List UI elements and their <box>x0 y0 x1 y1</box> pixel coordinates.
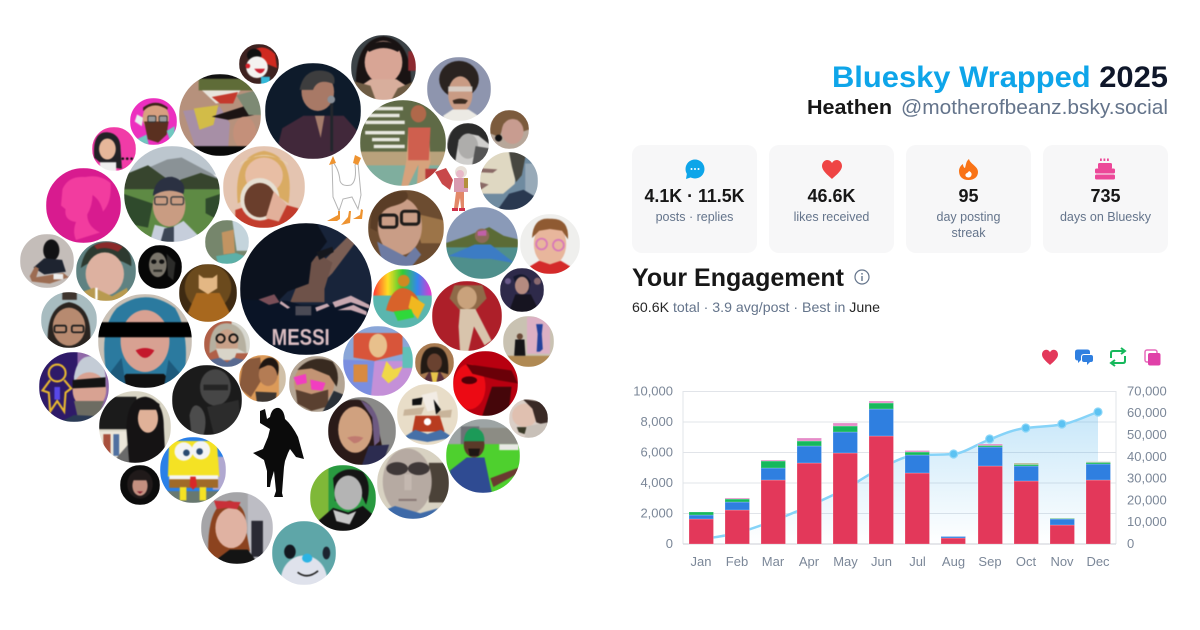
avatar: man swimming in lake <box>446 207 518 279</box>
cumulative line <box>701 412 1098 540</box>
stat value: 4.1K · 11.5K <box>644 186 744 206</box>
left axis labels: 10,000 <box>633 384 673 398</box>
avatar: rainbow cartoon turtle <box>373 269 432 328</box>
avatar: woman in leopard top <box>351 35 416 100</box>
left axis labels: 2,000 <box>640 506 673 520</box>
card: posts and replies <box>632 145 757 253</box>
avatar: man with glasses and cat on head <box>41 292 97 348</box>
icon: chat bubble <box>686 160 704 179</box>
month labels: Dec <box>1086 554 1110 569</box>
right axis labels: 30,000 <box>1127 470 1167 486</box>
avatar: red blurred face <box>453 351 518 416</box>
avatar: redhead with sunglasses on head <box>201 492 273 564</box>
avatar: man in mountain meadow <box>124 146 220 242</box>
avatar: colorful street art collage <box>343 326 413 396</box>
right axis labels: 50,000 <box>1127 427 1167 442</box>
avatar: brown skinned cartoon <box>415 343 454 382</box>
stat label: days on Bluesky <box>1060 210 1152 224</box>
month labels: Oct <box>1016 554 1036 569</box>
avatar: woman in knit hood <box>328 397 396 465</box>
bar: Jun <box>869 401 894 544</box>
month labels: Apr <box>799 554 820 569</box>
avatar: woman in Messi jersey <box>240 223 372 355</box>
stat label: day posting <box>937 210 1001 224</box>
illustration: black superhero silhouette <box>253 408 304 497</box>
avatar: ghoul portrait <box>138 245 182 289</box>
month labels: May <box>833 554 858 569</box>
avatar: teal teddy bear <box>272 521 336 585</box>
bar: Jan <box>689 512 714 544</box>
avatar: singer with microphone <box>265 63 361 159</box>
stat label: posts · replies <box>656 210 733 224</box>
avatar: woman with glasses and scarf <box>368 190 444 266</box>
left axis labels: 4,000 <box>640 475 673 490</box>
card: days on Bluesky <box>1043 145 1168 253</box>
avatar: small dog on red rug <box>432 281 502 351</box>
avatar: blonde woman with mug <box>223 146 305 228</box>
avatar: dark scream mask photo <box>172 365 242 435</box>
avatar: older man in glasses <box>204 321 250 367</box>
cumulative area <box>701 412 1098 544</box>
avatar: Underdog cartoon <box>397 384 458 445</box>
bar: Nov <box>1050 518 1074 544</box>
avatar: blue haired woman with censor bar <box>98 294 192 388</box>
right axis labels: 0 <box>1127 536 1134 551</box>
chart grid <box>683 391 1116 544</box>
avatar: cartoon woman on pink <box>92 127 136 171</box>
avatar: woman in beanie <box>76 241 136 301</box>
avatar: man with red collar <box>520 214 580 274</box>
month labels: Nov <box>1050 554 1074 569</box>
right axis labels: 70,000 <box>1127 384 1167 398</box>
left axis labels: 0 <box>666 536 673 551</box>
avatar: dark haired girl <box>120 465 160 505</box>
avatar: man at green river <box>446 419 520 493</box>
month labels: Sep <box>978 554 1002 569</box>
bar: Sep <box>978 444 1002 544</box>
avatar: woman lying sideways <box>509 399 548 438</box>
avatar: cat in renaissance costume <box>179 264 237 322</box>
handle: @motherofbeanz.bsky.social <box>901 97 1168 119</box>
avatar: woman in Messi jersey: MESSI <box>272 324 330 350</box>
legend: replies bubbles <box>1075 350 1093 365</box>
avatar: person in balaclava <box>20 234 74 288</box>
avatar: green portrait illustration <box>310 465 376 531</box>
month labels <box>691 554 1110 569</box>
stat label: likes received <box>794 210 869 224</box>
avatar: cat in tree <box>205 220 249 264</box>
illustration: goose line art <box>327 155 363 225</box>
bar: May <box>833 423 858 544</box>
icon: heart <box>822 160 842 179</box>
avatar: dark bar scene <box>500 268 544 312</box>
legend: likes heart <box>1042 350 1058 365</box>
bar: Aug <box>941 536 966 544</box>
bar: Oct <box>1014 463 1038 544</box>
legend: reposts arrows <box>1111 348 1125 366</box>
avatar: vintage pinup poster <box>360 100 446 186</box>
left axis labels: 8,000 <box>640 414 673 429</box>
avatar: black and white portrait <box>447 123 489 165</box>
stat value: 46.6K <box>808 186 856 206</box>
cumulative points <box>914 408 1102 459</box>
name: Heathen <box>807 97 892 119</box>
legend icons <box>1042 348 1160 366</box>
avatar: man with dark eye makeup <box>377 447 449 519</box>
avatar: curly haired woman <box>490 110 529 149</box>
right axis labels: 40,000 <box>1127 449 1167 464</box>
right axis labels: 10,000 <box>1127 514 1167 529</box>
stat value: 735 <box>1090 186 1121 206</box>
stacked bars <box>689 401 1110 544</box>
stat label second line: streak <box>951 226 986 240</box>
legend: quotes squares <box>1145 350 1160 366</box>
left axis labels <box>633 384 673 551</box>
avatar: pink Barbie silhouette <box>46 168 121 243</box>
month labels: Aug <box>942 554 965 569</box>
bar: Feb <box>725 498 750 544</box>
left axis labels: 6,000 <box>640 444 673 460</box>
bar: Apr <box>797 438 822 544</box>
icon: info <box>855 270 869 284</box>
avatar: cartoon Wakko <box>239 44 279 84</box>
avatar: museum visitor <box>503 316 554 367</box>
right axis labels <box>1127 384 1167 551</box>
icon: flame <box>959 159 978 180</box>
month labels: Jul <box>909 554 926 569</box>
avatar: afro and glasses portrait <box>427 57 491 121</box>
bar: Mar <box>761 460 786 544</box>
month labels: Mar <box>762 554 785 569</box>
title: Bluesky Wrapped 2025 <box>832 61 1168 94</box>
avatar: blue-gray side face <box>480 152 538 210</box>
combo chart: monthly engagement <box>633 384 1167 569</box>
month labels: Feb <box>726 554 748 569</box>
panel: avatar bubble cluster <box>20 35 580 585</box>
avatar: crochet woman <box>179 74 261 156</box>
right axis labels: 20,000 <box>1127 492 1167 508</box>
stat value: 95 <box>958 186 979 206</box>
avatar: woman with long black hair <box>99 391 171 463</box>
icon: birthday cake <box>1095 158 1115 180</box>
bar: Dec <box>1086 462 1110 544</box>
avatar: man in pink sunglasses <box>289 356 345 412</box>
avatar: SpongeBob cartoon <box>160 437 226 503</box>
heading: Your Engagement: Your Engagement <box>632 264 845 292</box>
right axis labels: 60,000 <box>1127 405 1167 420</box>
month labels: Jan <box>691 554 711 569</box>
illustration: pixel squirrel girl <box>435 166 468 211</box>
bar: Jul <box>905 450 930 544</box>
avatar: neon gingerbread and bearded man <box>39 352 109 422</box>
month labels: Jun <box>871 554 892 569</box>
card: streak <box>906 145 1031 253</box>
avatar: woman with tattoo <box>239 355 286 402</box>
engagement summary: 60.6K total · 3.9 avg/post · Best in June <box>632 299 880 315</box>
card: likes <box>769 145 894 253</box>
avatar: bearded cartoon with glasses <box>130 98 177 145</box>
